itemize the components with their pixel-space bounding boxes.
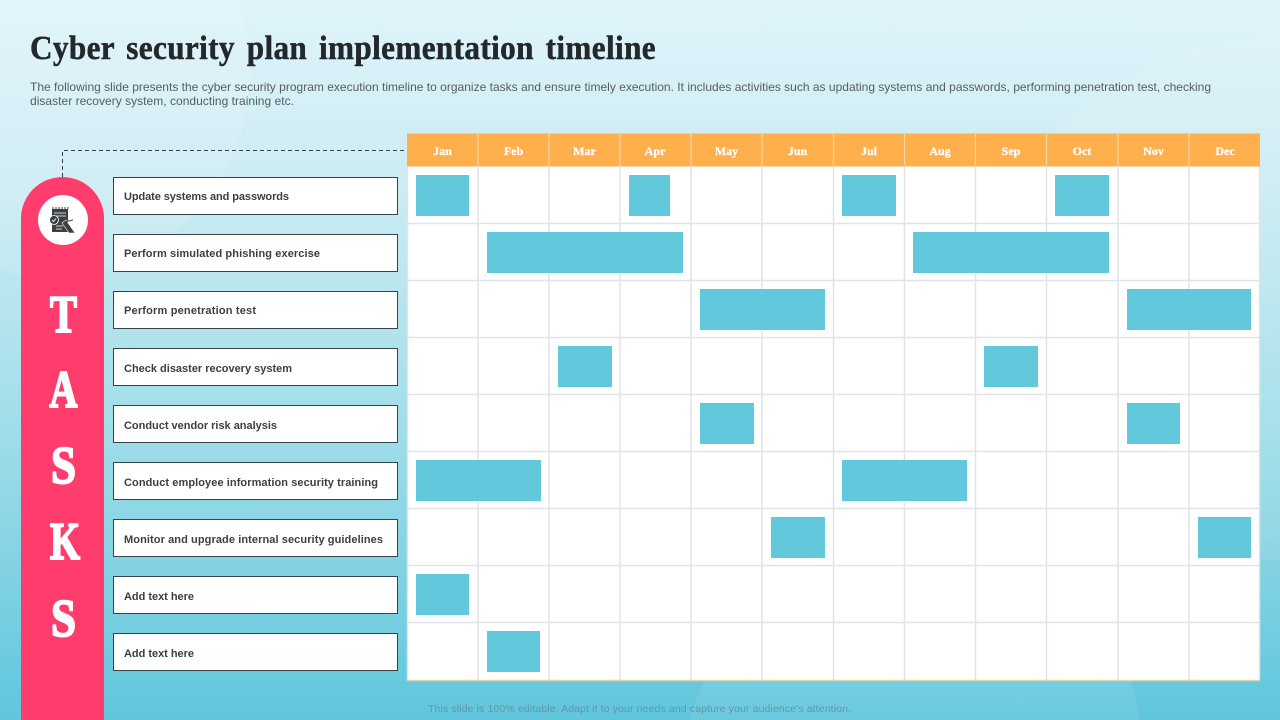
task: vendor risk <box>114 406 398 442</box>
month header: Aug <box>929 144 951 158</box>
task: phishing: Perform simulated phishing exercise <box>124 248 320 260</box>
panel: tasks sidebar <box>21 177 104 720</box>
vertical label: TASKS <box>50 286 80 648</box>
month header: Feb <box>504 144 523 158</box>
task: placeholder 1 <box>114 576 398 614</box>
grid body <box>407 166 1260 680</box>
month header: Apr <box>645 144 666 158</box>
task: guidelines: Monitor and upgrade internal security guidelines <box>124 534 383 546</box>
description <box>30 80 1211 108</box>
task: employee training: Conduct employee information security training <box>124 477 378 489</box>
month header: Nov <box>1143 144 1164 158</box>
month header: Jul <box>861 144 878 158</box>
chart: gantt timeline <box>407 134 1260 680</box>
schedule bars <box>416 175 1251 672</box>
footer note: This slide is 100% editable. Adapt it to your needs and capture your audience's attention. <box>428 703 851 715</box>
month header <box>407 134 1260 166</box>
month header: Sep <box>1002 144 1021 158</box>
month header: Jun <box>788 144 807 158</box>
task: update systems <box>114 178 398 214</box>
task: placeholder 2 <box>114 634 398 670</box>
title: Cyber security plan implementation timeline <box>30 30 656 67</box>
month header: May <box>715 144 738 158</box>
task: vendor risk: Conduct vendor risk analysis <box>124 420 277 432</box>
task: penetration test: Perform penetration test <box>124 305 256 317</box>
task: update systems: Update systems and passwords <box>124 191 289 203</box>
vertical label: TASKS: S <box>51 437 76 495</box>
task: disaster recovery: Check disaster recovery system <box>124 363 292 375</box>
task: penetration test <box>114 292 398 328</box>
month header: Mar <box>573 144 596 158</box>
task: disaster recovery <box>114 348 398 386</box>
description: The following slide presents the cyber security program execution timeline to organize tasks and ensure timely execution. It includes activities such as updating systems and passwords, performing penetration test, checking <box>30 80 1211 94</box>
task: guidelines <box>114 520 398 556</box>
panel: task labels <box>114 178 398 670</box>
task: phishing <box>114 234 398 272</box>
task: placeholder 1: Add text here <box>124 591 194 603</box>
month header: Dec <box>1215 144 1235 158</box>
vertical label: TASKS: A <box>50 361 78 419</box>
description: disaster recovery system, conducting training etc. <box>30 94 294 108</box>
icon: task checklist <box>38 195 88 245</box>
month header: Oct <box>1073 144 1091 158</box>
vertical label: TASKS: T <box>50 286 77 344</box>
vertical label: TASKS: K <box>50 513 80 571</box>
task: placeholder 2: Add text here <box>124 648 194 660</box>
task: employee training <box>114 462 398 500</box>
vertical label: TASKS: S <box>51 590 76 648</box>
month header: Jan <box>433 144 452 158</box>
dashed connector <box>62 150 407 177</box>
